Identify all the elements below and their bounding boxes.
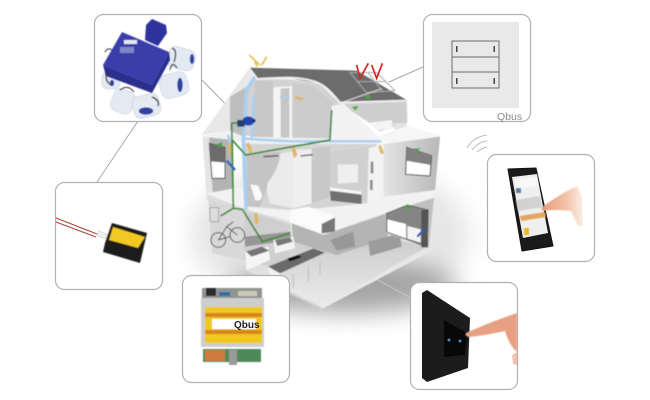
icon: pointing hand: [465, 313, 517, 352]
icon: screen rows: [515, 177, 546, 235]
panel: smartphone: [488, 154, 594, 262]
icon: switch plate: [432, 22, 519, 108]
toilet: [250, 184, 263, 201]
large window: [387, 205, 428, 247]
first floor left room: [203, 137, 233, 193]
icon: yellow chimney air outlet: [249, 55, 267, 67]
blue window handles: [227, 161, 425, 237]
gable outer wall: [202, 68, 257, 135]
icon: sensor wires: [56, 218, 97, 237]
upper slab band: [203, 131, 382, 145]
panel: sensor module: [56, 182, 162, 290]
sloped white wall: [329, 103, 380, 144]
ground right room: [385, 198, 434, 247]
icon: wifi arcs: [467, 135, 487, 152]
ceiling shower heads: [263, 155, 313, 157]
bike room: [208, 199, 244, 260]
icon: black wall panel: [422, 290, 470, 382]
icon: white duct ports: [102, 45, 197, 120]
kitchen room: [244, 211, 295, 273]
ground shadow: [190, 160, 470, 313]
roof rim: [249, 68, 406, 103]
green cables: [221, 110, 332, 242]
ground plate: [245, 235, 433, 308]
icon: display: [444, 320, 467, 357]
yellow air arrows: [228, 96, 384, 224]
icon: black sensor box: [103, 223, 147, 263]
living room back wall: [292, 214, 388, 257]
white column with controls: [367, 144, 384, 208]
window upper right: [406, 147, 432, 176]
icon: module body: [201, 288, 264, 365]
right attic room: [340, 100, 407, 132]
bicycle: [211, 222, 245, 247]
vanity: [330, 190, 362, 204]
ventilation unit small: [237, 116, 256, 127]
first floor slab: [207, 187, 435, 234]
brand label: Qbus: [497, 111, 522, 123]
roof: [250, 68, 407, 103]
icon: red solar marks: [357, 63, 382, 78]
panel: touch screen: [410, 282, 518, 390]
icon: blue housing: [103, 19, 170, 93]
brand label on controller: Qbus: [234, 320, 260, 331]
icon: hose clamps: [105, 48, 177, 106]
bathroom mirror: [337, 164, 358, 184]
window upper left: [209, 143, 225, 178]
upper slab right: [377, 126, 441, 143]
first floor right room: [383, 137, 440, 198]
connector lines: [97, 67, 423, 298]
wall panel: [210, 208, 219, 222]
icon: pointing finger: [541, 186, 583, 226]
icon: connector: [97, 231, 107, 239]
living floor: [280, 238, 428, 307]
icon: switch buttons: [452, 41, 499, 88]
attic back wall: [230, 79, 340, 140]
green vent markers: [215, 95, 421, 211]
icon: button LEDs: [456, 46, 495, 84]
house cutaway: [202, 55, 441, 311]
panel: ventilation unit: [94, 14, 202, 122]
panel: Qbus controller: [182, 276, 290, 382]
bathtub: [290, 207, 335, 234]
first floor center room: [245, 144, 383, 210]
icon: phone screen: [512, 174, 548, 238]
icon: phone body: [508, 168, 553, 251]
sofas: [330, 232, 355, 251]
panel: wall switch: [424, 14, 530, 123]
roof window grid: [350, 73, 395, 93]
icon: port openings: [110, 54, 194, 114]
table legs: [293, 262, 320, 288]
blue air ducts: [228, 78, 380, 208]
bed: [369, 120, 393, 131]
kitchen counters: [245, 247, 270, 270]
